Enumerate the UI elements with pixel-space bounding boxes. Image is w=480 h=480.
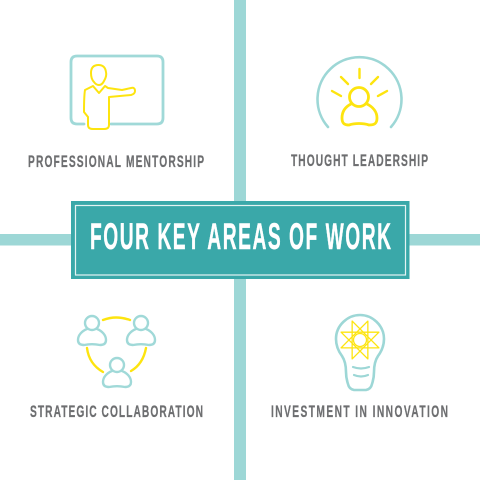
banner inner border bbox=[76, 206, 406, 275]
board bbox=[71, 56, 163, 124]
heading: thought leadership: THOUGHT LEADERSHIP bbox=[291, 151, 428, 169]
heading: strategic collaboration: STRATEGIC COLLABORATION bbox=[30, 402, 203, 420]
title: FOUR KEY AREAS OF WORK bbox=[90, 216, 392, 258]
halo arc bbox=[318, 57, 401, 127]
star sun bbox=[341, 321, 379, 359]
title banner bbox=[71, 201, 410, 279]
light rays bbox=[332, 69, 387, 96]
heading: professional mentorship: PROFESSIONAL MENTORSHIP bbox=[28, 152, 204, 170]
head and shoulders bbox=[342, 88, 377, 125]
presenter figure bbox=[84, 65, 135, 129]
bulb outline bbox=[336, 315, 384, 390]
people bbox=[78, 316, 155, 387]
connecting arcs bbox=[87, 318, 146, 372]
banner background bbox=[71, 201, 410, 279]
filament lines bbox=[353, 367, 369, 376]
heading: investment in innovation: INVESTMENT IN INNOVATION bbox=[271, 402, 448, 420]
icon: presenter at board bbox=[71, 56, 163, 129]
icon: light bulb bbox=[336, 315, 384, 390]
icon: collaboration circle bbox=[78, 316, 155, 387]
icon: thought leader bbox=[318, 57, 401, 127]
